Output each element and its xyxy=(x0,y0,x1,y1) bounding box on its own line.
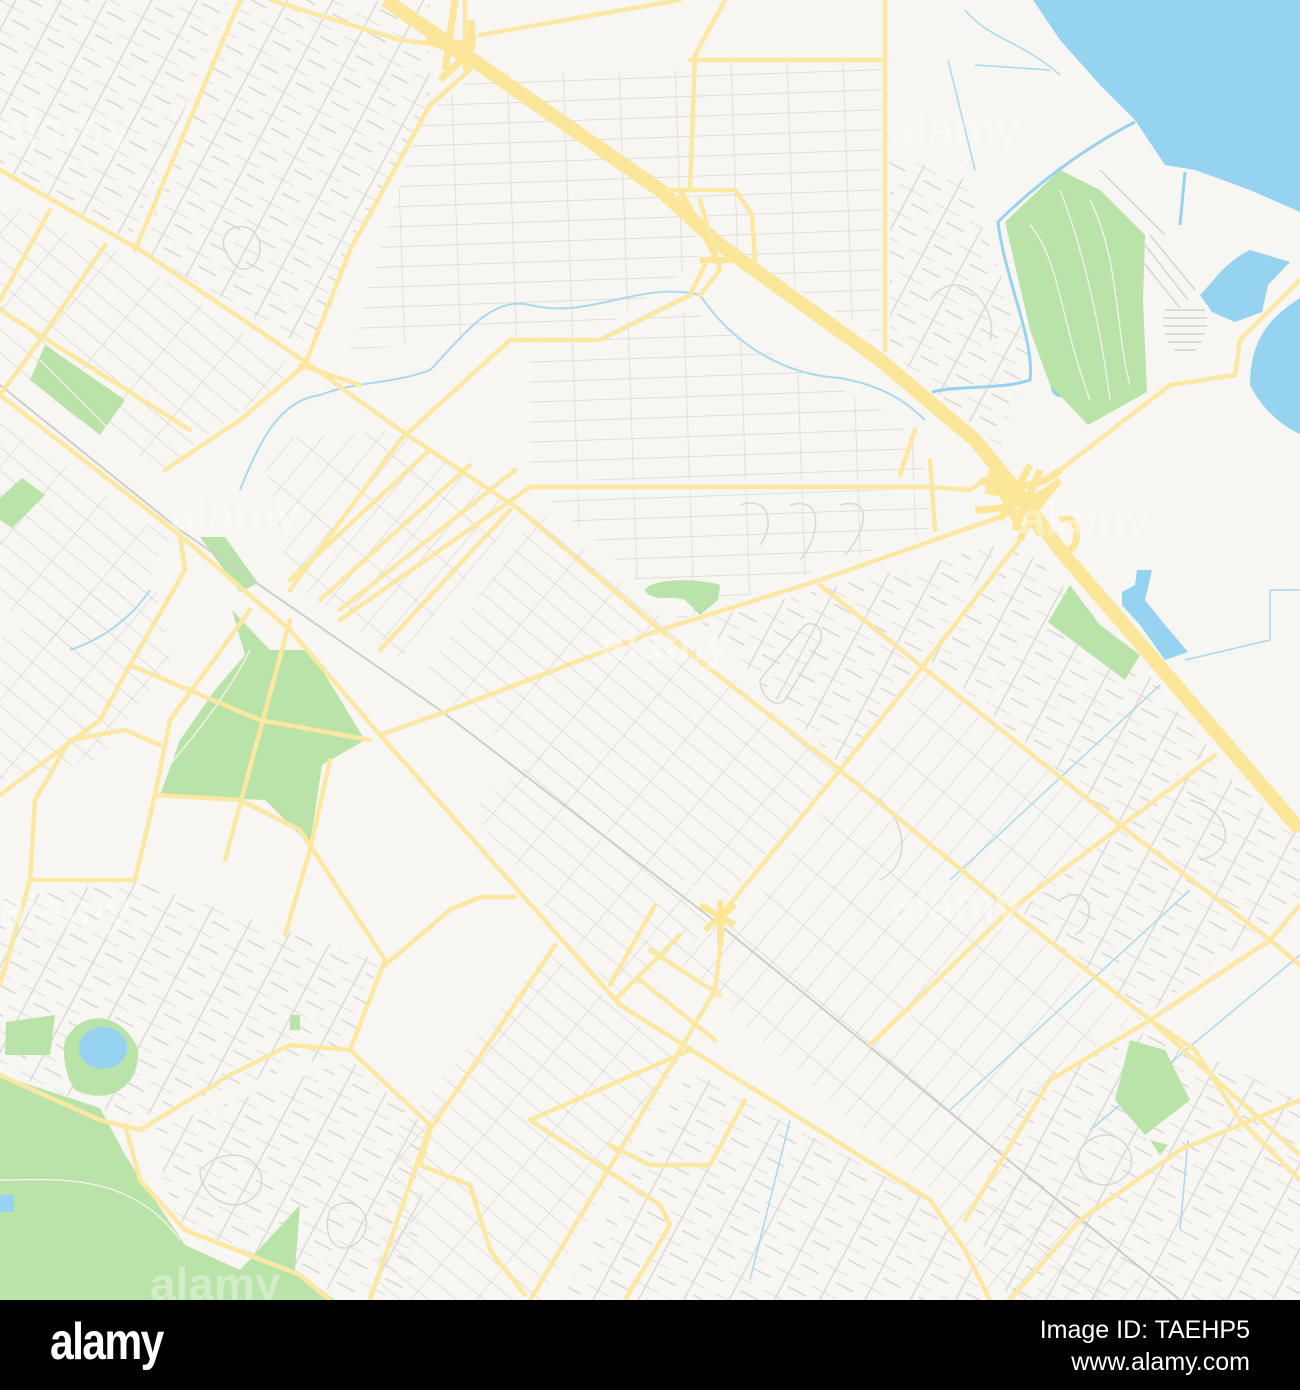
watermarks xyxy=(0,103,1151,1310)
water: lagoons xyxy=(1051,250,1300,660)
watermarks: alamy xyxy=(1020,493,1151,545)
image id text: www.alamy.com xyxy=(1071,1348,1250,1376)
highway xyxy=(385,0,1300,830)
pond xyxy=(79,1027,127,1069)
railway xyxy=(0,385,1180,1300)
interchange: north xyxy=(425,0,480,80)
park paths xyxy=(0,190,1130,1240)
striped marsh ponds xyxy=(1100,170,1207,350)
image id text: Image ID: TAEHP5 xyxy=(1040,1316,1250,1344)
interchange: east of creek xyxy=(660,190,740,265)
creek xyxy=(70,292,925,650)
watermarks: alamy xyxy=(890,878,1021,930)
water: slough xyxy=(932,122,1185,392)
interchange: central xyxy=(975,465,1077,551)
watermarks: alamy xyxy=(170,488,301,540)
watermarks: alamy xyxy=(890,103,1021,155)
watermarks: alamy xyxy=(0,883,131,935)
logo: alamy xyxy=(50,1313,163,1371)
drainage canals xyxy=(750,10,1300,1280)
parks xyxy=(0,170,1190,1300)
footer strip xyxy=(0,1300,1300,1390)
watermarks: alamy xyxy=(0,103,131,155)
image id text xyxy=(1040,1316,1250,1376)
water: bay xyxy=(1033,0,1300,212)
watermarks: alamy xyxy=(600,618,731,670)
interchange: south xyxy=(700,900,735,945)
curved suburban streets xyxy=(200,226,1225,1248)
